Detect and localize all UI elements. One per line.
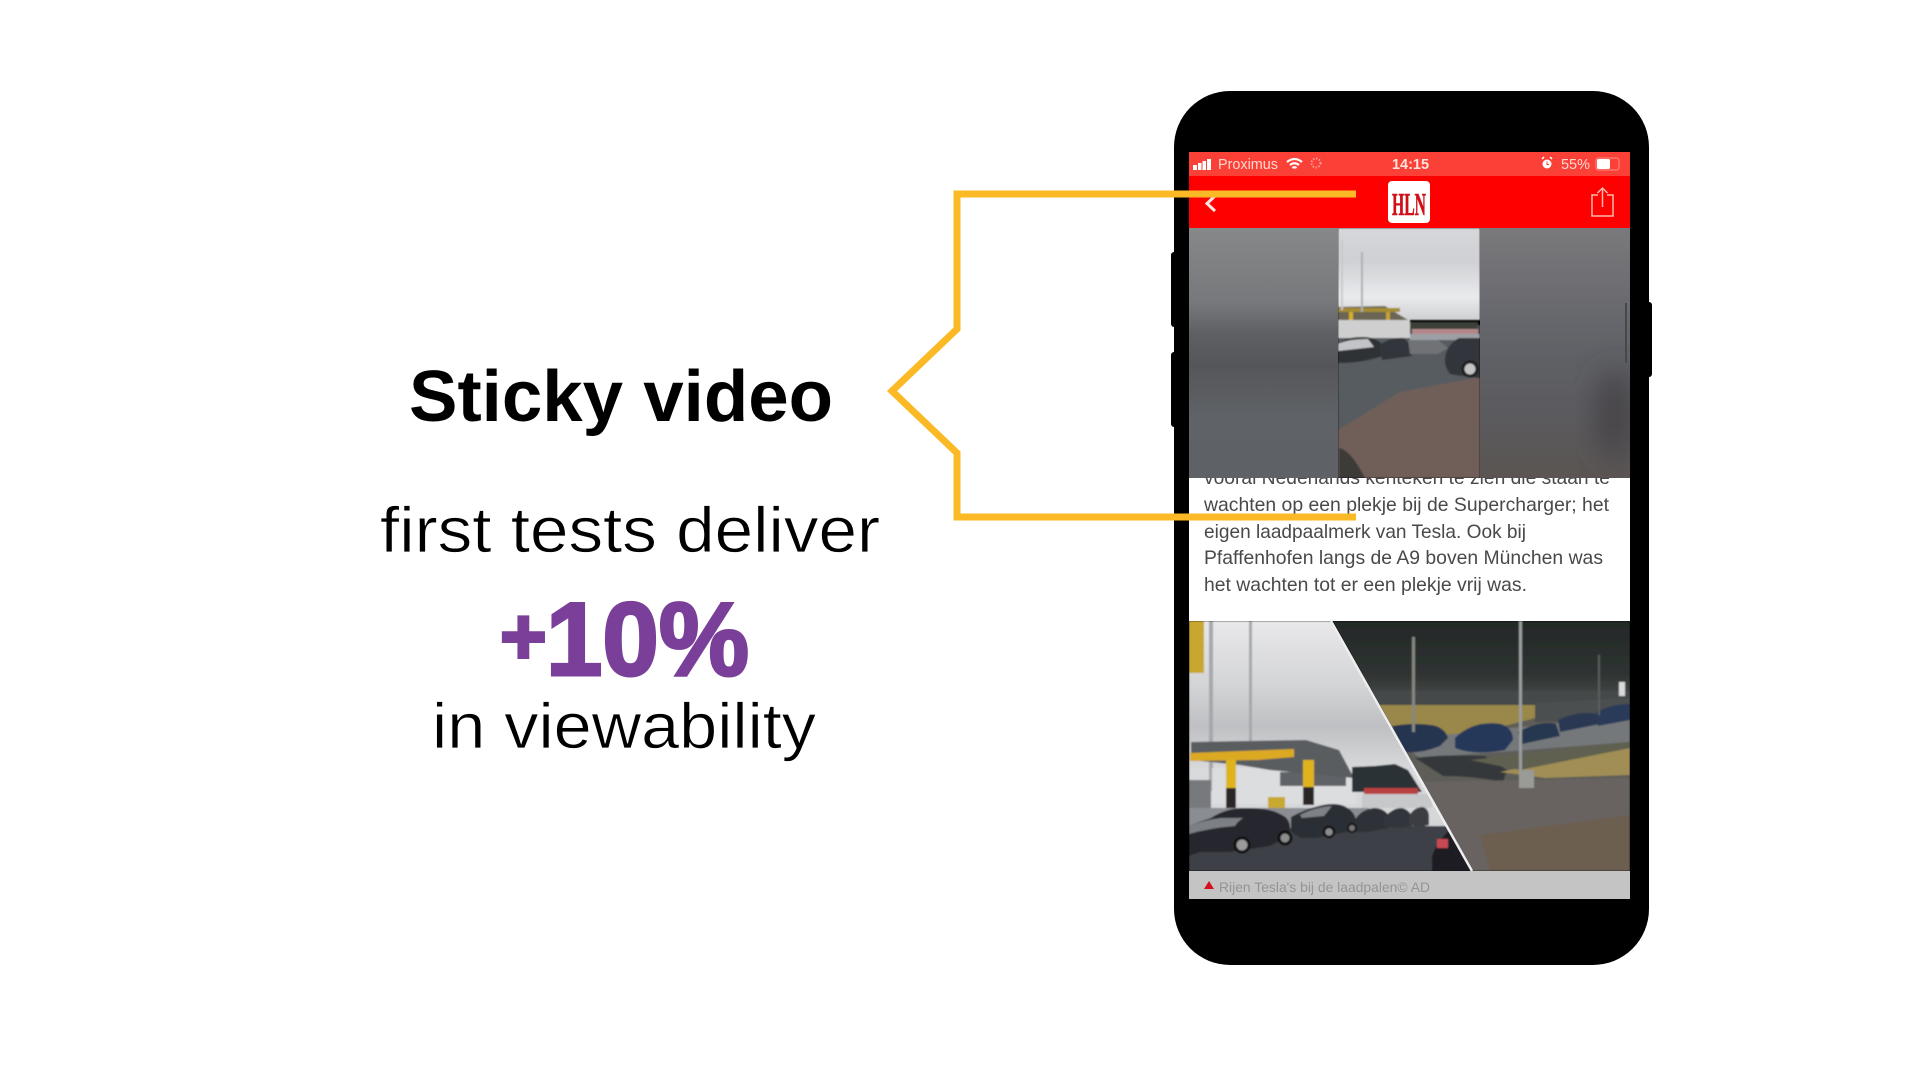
alarm icon	[1542, 157, 1552, 168]
video: blurred right panel	[1480, 228, 1635, 478]
icon: back chevron	[1207, 196, 1215, 211]
photo: diagonal divider	[1331, 621, 1472, 871]
icon: share	[1592, 188, 1613, 216]
signal bars	[1193, 159, 1211, 170]
app nav bar	[1189, 176, 1630, 228]
status bar: Proximus	[1218, 157, 1278, 173]
battery icon	[1596, 158, 1619, 170]
text: in viewability: in viewability	[432, 690, 816, 762]
phone side buttons	[1171, 252, 1652, 427]
article text: vooral Nederlands kenteken te zien die staan te	[1204, 467, 1610, 489]
stat: +10%: +	[500, 592, 547, 681]
phone mockup	[1171, 91, 1652, 965]
photo: left scene	[1189, 621, 1479, 871]
phone body	[1174, 91, 1649, 965]
article text: het wachten tot er een plekje vrij was.	[1204, 574, 1527, 596]
video: centre frame	[1338, 228, 1480, 478]
logo: HLN	[1388, 181, 1430, 223]
video scroll indicator	[1625, 303, 1627, 363]
status bar	[1189, 152, 1630, 176]
title: Sticky video: Sticky video	[409, 357, 833, 437]
image caption: Rijen Tesla's bij de laadpalen© AD	[1219, 880, 1430, 895]
activity spinner	[1312, 158, 1320, 168]
image caption	[1189, 871, 1630, 899]
logo: HLN: HLN	[1392, 186, 1426, 222]
wifi icon	[1287, 159, 1302, 168]
callout bracket	[892, 194, 1356, 517]
article text: eigen laadpaalmerk van Tesla. Ook bij	[1204, 521, 1526, 543]
status bar: 55%	[1561, 157, 1590, 173]
article text: Pfaffenhofen langs de A9 boven München was	[1204, 547, 1603, 569]
stat: +10%: 10%	[546, 582, 749, 698]
sticky video player	[1189, 228, 1635, 478]
status bar: 14:15	[1392, 157, 1429, 173]
text: first tests deliver: first tests deliver	[380, 494, 880, 566]
video: blurred left panel	[1189, 228, 1338, 478]
article text: wachten op een plekje bij de Supercharger; het	[1203, 494, 1610, 516]
photo: right scene	[1330, 621, 1630, 871]
article text	[1189, 467, 1630, 621]
article photo	[1189, 621, 1630, 871]
